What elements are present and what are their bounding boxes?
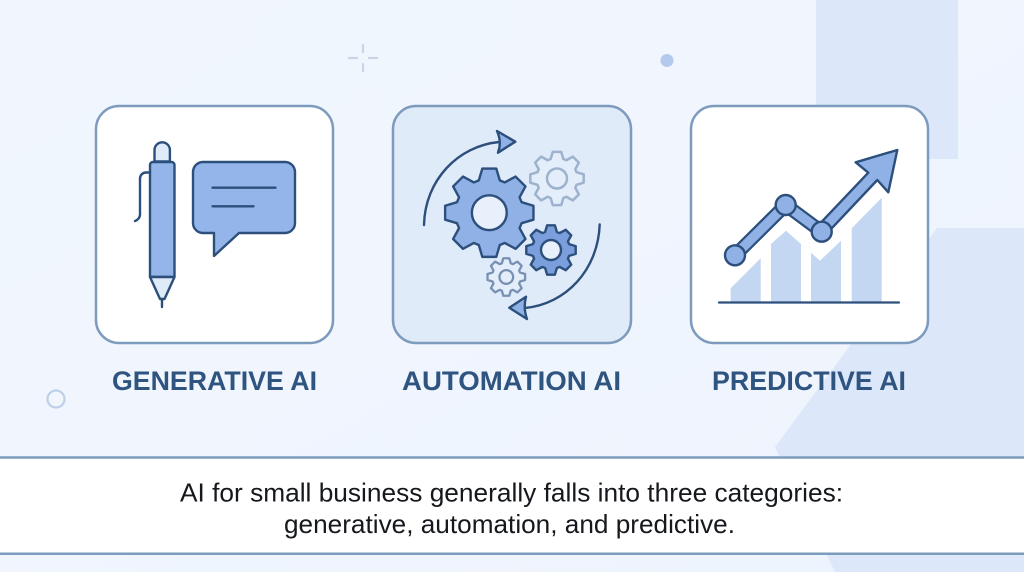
arrow: clockwise bottom xyxy=(509,224,600,319)
chart: bars xyxy=(731,198,882,302)
caption text: AI for small business generally falls into three categories: xyxy=(180,478,843,508)
caption band xyxy=(0,457,1024,554)
card: predictive xyxy=(691,106,928,343)
card: generative xyxy=(96,106,333,343)
icon: main gear xyxy=(445,169,533,257)
panel: predictive AI xyxy=(691,106,928,396)
background shape: top right panel xyxy=(816,0,958,159)
card: automation xyxy=(393,106,631,343)
label: generative AI: GENERATIVE AI xyxy=(112,366,317,396)
decoration: plus sparkle xyxy=(349,45,377,71)
chart: trend arrow xyxy=(725,150,897,265)
chart: baseline xyxy=(719,301,899,304)
icon: pen xyxy=(135,142,174,307)
icon: small pale gear xyxy=(488,258,525,296)
icon: speech bubble xyxy=(193,162,295,256)
background shape: lower right hexagon xyxy=(775,228,1024,572)
icon: dark gear xyxy=(526,225,576,275)
decoration: ring xyxy=(48,390,64,408)
label: automation AI: AUTOMATION AI xyxy=(402,366,621,396)
arrow: clockwise top xyxy=(424,131,515,225)
icon: pale gear top xyxy=(530,152,584,205)
label: predictive AI: PREDICTIVE AI xyxy=(712,366,906,396)
panel: automation AI xyxy=(393,106,631,396)
caption text: generative, automation, and predictive. xyxy=(284,509,735,539)
panel: generative AI xyxy=(96,106,333,396)
caption text xyxy=(180,478,843,539)
decoration: dot xyxy=(660,54,674,67)
